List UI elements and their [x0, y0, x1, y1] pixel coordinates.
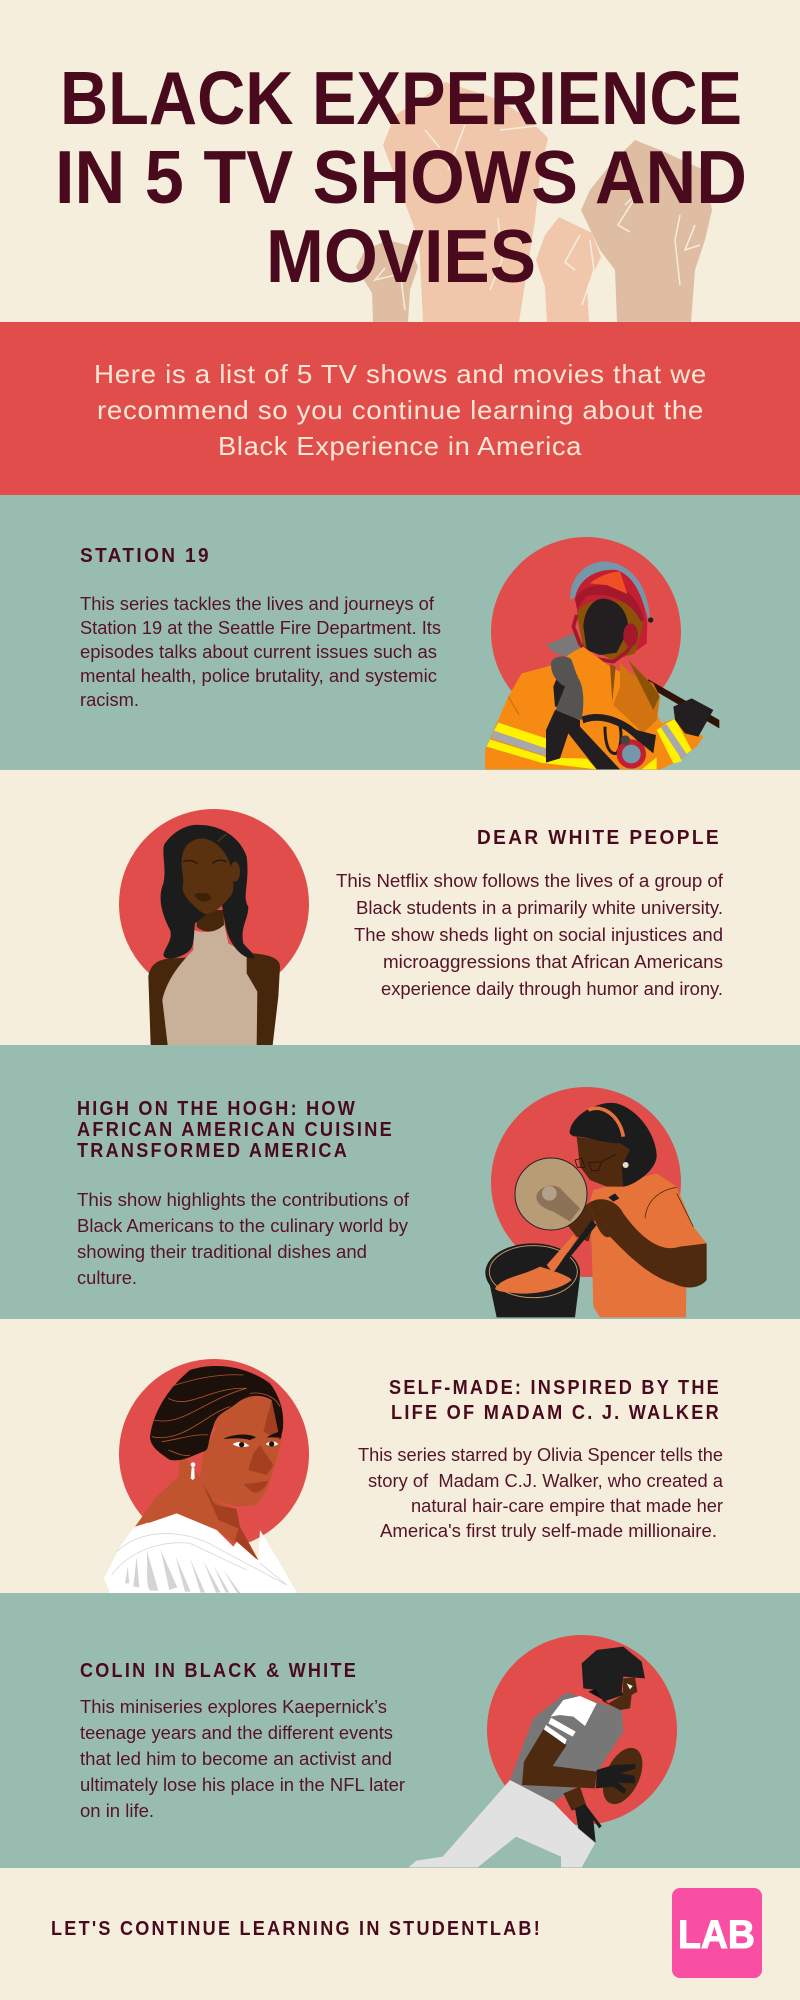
icon: LAB logo	[672, 1888, 762, 1978]
panel: High on the Hogh	[0, 1045, 800, 1319]
text: Colin in Black & White description	[80, 1696, 405, 1821]
heading: High on the Hogh	[77, 1098, 394, 1162]
icon: LAB logo: LAB	[678, 1913, 755, 1957]
panel: intro	[0, 322, 800, 495]
footer call to action: LET'S CONTINUE LEARNING IN STUDENTLAB!	[51, 1918, 542, 1940]
icon: firefighter on red circle	[485, 537, 719, 769]
heading: Dear White People: DEAR WHITE PEOPLE	[477, 827, 721, 849]
text: Self-Made description	[358, 1444, 724, 1541]
heading: Self-Made	[389, 1377, 721, 1424]
text: Colin in Black & White description: teenage years and the different events	[80, 1722, 393, 1743]
panel: footer	[0, 1868, 800, 2000]
title: MOVIES	[266, 214, 536, 298]
panel: Station 19	[0, 495, 800, 770]
text: Colin in Black & White description: on in life.	[80, 1800, 154, 1821]
text: Dear White People description	[336, 870, 724, 999]
text: Station 19 description: episodes talks about current issues such as	[80, 641, 437, 662]
text: Self-Made description: America's first truly self-made millionaire.	[380, 1520, 717, 1541]
text: Dear White People description: microaggressions that African Americans	[383, 951, 723, 972]
text: High on the Hogh description: culture.	[77, 1267, 137, 1288]
heading: High on the Hogh: HIGH ON THE HOGH: HOW	[77, 1098, 357, 1120]
text: Self-Made description: story of Madam C.J. Walker, who created a	[368, 1470, 724, 1491]
text: High on the Hogh description: This show highlights the contributions of	[77, 1189, 410, 1210]
panel: Dear White People	[0, 770, 800, 1045]
icon: woman cooking on red circle	[485, 1087, 707, 1317]
intro text: recommend so you continue learning about the	[97, 395, 704, 425]
heading: Self-Made: SELF-MADE: INSPIRED BY THE	[389, 1377, 721, 1399]
icon: raised fists	[356, 82, 712, 322]
intro text	[94, 359, 707, 461]
text: Station 19 description: mental health, police brutality, and systemic	[80, 665, 437, 686]
icon: woman with wavy hair on red circle	[119, 809, 309, 1045]
intro text: Black Experience in America	[218, 431, 582, 461]
text: High on the Hogh description: Black Americans to the culinary world by	[77, 1215, 409, 1236]
text: High on the Hogh description	[77, 1189, 410, 1288]
text: Dear White People description: This Netflix show follows the lives of a group of	[336, 870, 724, 891]
heading: High on the Hogh: TRANSFORMED AMERICA	[77, 1140, 349, 1162]
panel: Self-Made	[0, 1319, 800, 1593]
heading: Colin in Black & White: COLIN IN BLACK & WHITE	[80, 1660, 358, 1682]
text: Dear White People description: Black students in a primarily white university.	[356, 897, 723, 918]
text: Dear White People description: The show sheds light on social injustices and	[354, 924, 723, 945]
icon: football player on red circle	[408, 1635, 677, 1867]
title: IN 5 TV SHOWS AND	[55, 135, 747, 219]
heading: Station 19: STATION 19	[80, 545, 211, 567]
text: Self-Made description: This series starred by Olivia Spencer tells the	[358, 1444, 723, 1465]
heading: High on the Hogh: AFRICAN AMERICAN CUISINE	[77, 1119, 394, 1141]
text: Colin in Black & White description: ultimately lose his place in the NFL later	[80, 1774, 405, 1795]
text: Colin in Black & White description: This miniseries explores Kaepernick’s	[80, 1696, 387, 1717]
panel: Colin in Black & White	[0, 1593, 800, 1868]
text: Station 19 description: This series tackles the lives and journeys of	[80, 593, 435, 614]
header panel	[0, 0, 800, 322]
text: Colin in Black & White description: that led him to become an activist and	[80, 1748, 392, 1769]
heading: Self-Made: LIFE OF MADAM C. J. WALKER	[391, 1402, 721, 1424]
text: High on the Hogh description: showing their traditional dishes and	[77, 1241, 367, 1262]
text: Self-Made description: natural hair-care empire that made her	[411, 1495, 723, 1516]
title	[55, 56, 747, 298]
text: Station 19 description	[80, 593, 441, 710]
icon: Madam C.J. Walker portrait on red circle	[103, 1359, 309, 1593]
text: Dear White People description: experience daily through humor and irony.	[381, 978, 723, 999]
text: Station 19 description: Station 19 at the Seattle Fire Department. Its	[80, 617, 441, 638]
intro text: Here is a list of 5 TV shows and movies that we	[94, 359, 707, 389]
text: Station 19 description: racism.	[80, 689, 139, 710]
